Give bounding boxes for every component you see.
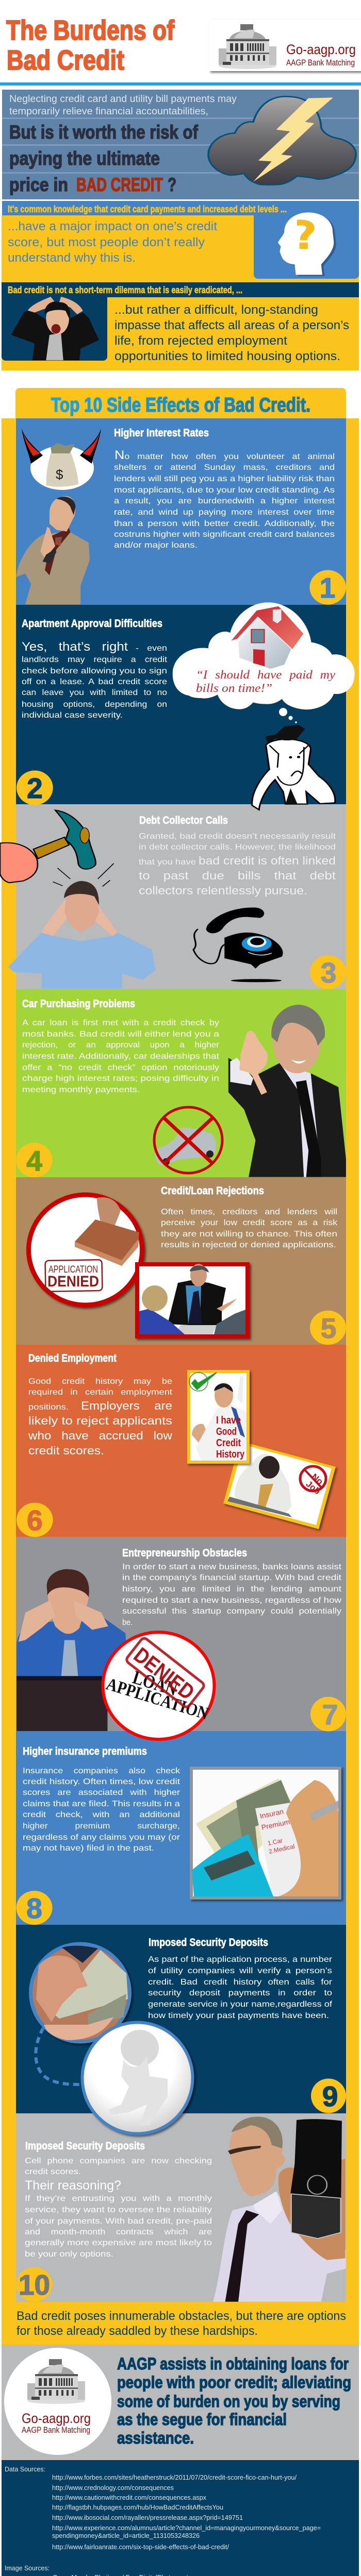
body text: Yes, that’s right [22, 640, 128, 654]
body text: successful this startup company could potentially [122, 1607, 341, 1616]
logo box: Go-aagp.org [209, 20, 361, 71]
photo: application denied stamp [29, 1195, 142, 1305]
icon: devil horned money bag [22, 429, 101, 490]
photo: insurance premium calculation: 1.Car [267, 1837, 283, 1847]
badge 8 [17, 1891, 53, 1925]
logo ellipse [4, 2348, 111, 2455]
body text: landlords may require a credit [22, 655, 168, 664]
good credit caption [216, 1415, 245, 1460]
common knowledge heading: It's common knowledge that credit card payments and increased debt levels ... [8, 204, 287, 214]
panel: intro question [2, 90, 359, 199]
data sources: http://www.experience.com/alumnus/article?channel_id=managingyourmoney&source_page= [52, 2524, 321, 2532]
panel: top 10 frame [2, 388, 359, 2345]
badge 3 [310, 955, 346, 989]
data sources: http://www.fairloanrate.com/six-top-side-effects-of-bad-credit/ [52, 2543, 229, 2551]
question headline: BAD CREDIT [76, 174, 163, 195]
panel: 8 insurance [16, 1731, 346, 1925]
body text: likely to reject applicants [28, 1414, 172, 1427]
body text [161, 1208, 338, 1249]
body text: security deposit payments in order to [148, 1989, 332, 1997]
panel: 1 higher interest [16, 418, 346, 605]
body text [22, 1019, 220, 1094]
body text [28, 1377, 173, 1457]
body text: required in certain employment [28, 1388, 173, 1397]
photo: application denied stamp: DENIED [47, 1273, 99, 1290]
icon: denied loan application: LOAN [130, 1667, 180, 1700]
quote: bills on time!” [196, 682, 272, 694]
body text: of utility companies will verify a person’s [148, 1967, 332, 1975]
body text: can leave you with limited to no [22, 688, 167, 697]
body text: credit history. Often times, low credit [23, 1777, 180, 1786]
body text: generally more expensive are most likely to [25, 2239, 212, 2247]
body text: credit check, with an additional [23, 1810, 180, 1819]
question headline: paying the ultimate [9, 148, 160, 169]
body text: off on a lease. A bad credit score [22, 677, 167, 686]
good credit caption: Good [216, 1426, 237, 1437]
photo: business meeting [135, 1262, 250, 1338]
heading: Imposed Security Deposits [149, 1937, 268, 1948]
data sources [5, 2465, 321, 2551]
body text: results in rejected or denied applications. [161, 1241, 336, 1249]
impact text: ...have a major impact on one’s credit [8, 219, 217, 233]
image sources [5, 2564, 315, 2576]
panel: 10 phone [16, 2113, 346, 2302]
good credit caption: History [216, 1449, 245, 1460]
body text: costruns higher with significant credit card balances [114, 530, 335, 539]
icon: hammer [0, 810, 114, 887]
dilemma heading: Bad credit is not a short-term dilemma that is easily eradicated, ... [8, 284, 242, 295]
photo: insurance premium calculation: 2.Medical [268, 1843, 296, 1855]
data sources: http://flagstbh.hubpages.com/hub/HowBadCreditAffectsYou [52, 2503, 223, 2511]
photo: man with headache in blue shirt [8, 881, 155, 989]
burden text: ...but rather a difficult, long-standing [114, 303, 318, 317]
badge 5 [310, 1311, 346, 1345]
body text: rejection, or an approval upon a higher [22, 1041, 220, 1049]
badge 10: 10 [19, 2269, 50, 2301]
data sources: http://www.cautionwithcredit.com/consequences.aspx [52, 2494, 206, 2501]
intro text: Neglecting credit card and utility bill payments may [9, 94, 237, 105]
body text: lenders will still peg you as a higher liability risk than [114, 474, 335, 483]
body text: in the company’s financial startup. With bad credit [122, 1573, 342, 1582]
body text: how timely your past payments have been. [148, 2011, 329, 2020]
photo: application denied stamp: APPLICATION [48, 1264, 98, 1275]
body text: claims that are filed. This results in a [23, 1800, 180, 1808]
body text: generate service in your name,regardless of [148, 2000, 333, 2009]
body text: most applicants, due to your low credit standing. As [114, 486, 335, 495]
dilemma band [2, 282, 359, 297]
question headline [9, 122, 199, 195]
title: The Burdens of [6, 15, 175, 46]
AAGP text [117, 2354, 351, 2447]
badge 1 [309, 570, 346, 605]
panel: 6 employment [16, 1345, 346, 1537]
closing text [17, 2309, 346, 2338]
photo: businessman thumb down [228, 1005, 346, 1177]
photo: hands with dollars [31, 1944, 130, 2042]
body text: credit. Bad credit history often calls for [148, 1978, 333, 1987]
quote: “I should have paid my [196, 668, 336, 681]
photo: entrepreneur with headache [17, 1569, 126, 1731]
body text: As part of the application process, a number [148, 1955, 333, 1964]
body text [22, 640, 168, 720]
badge 4: 4 [26, 1145, 42, 1177]
intro text: temporarily relieve financial accountabilities, [9, 106, 208, 117]
logo ellipse: AAGP Bank Matching [22, 2426, 90, 2435]
blue block [254, 215, 359, 279]
body text: offer a “no credit check” option notoriously [22, 1063, 219, 1072]
body text: rate, and wind up paying more interest over time [114, 508, 335, 517]
panel: sources [2, 2460, 359, 2576]
body text: credit scores. [28, 1444, 104, 1457]
body text: be your only options. [25, 2250, 113, 2259]
photo: no job [223, 1441, 336, 1529]
good credit caption: Credit [216, 1437, 241, 1449]
body text: Often times, creditors and lenders will [161, 1208, 337, 1216]
badge 9 [311, 2078, 346, 2113]
heading: Denied Employment [28, 1352, 117, 1364]
body text: charge high interest rates; posing difficulty in [22, 1074, 219, 1083]
body text: and/or major loans. [114, 541, 198, 550]
badge 3: 3 [321, 957, 336, 989]
badge 8: 8 [26, 1892, 42, 1924]
heading: Higher insurance premiums [23, 1745, 147, 1757]
badge 9: 9 [322, 2080, 338, 2112]
icon: worried cartoon man [252, 725, 335, 810]
data sources: spendingmoney&article_id=article_1131053248326 [52, 2532, 200, 2539]
icon: thought cloud with house [173, 602, 355, 723]
dashed arc [36, 2028, 83, 2084]
body text: bad credit is often linked [199, 854, 336, 867]
body text: Employers are [81, 1399, 172, 1412]
badge 1: 1 [320, 572, 335, 604]
body text: of your payments. With bad credit, pre-paid [25, 2217, 212, 2226]
body text: required to start a new business, regardless of how [122, 1596, 342, 1605]
heading: Debt Collector Calls [139, 815, 228, 826]
body text: and month-month contracts which are [25, 2228, 212, 2236]
icon: falling telephone [193, 908, 283, 982]
body text [114, 448, 335, 550]
photo: no job: Job [304, 1479, 322, 1496]
quote [196, 668, 336, 694]
panel: 7 entrepreneurship [16, 1537, 346, 1739]
burden text [114, 303, 349, 363]
heading: Entrepreneurship Obstacles [122, 1547, 247, 1559]
body text [139, 832, 336, 897]
badge 2 [17, 771, 53, 805]
body text: Cell phone companies are now checking [25, 2157, 212, 2165]
panel: common knowledge [2, 201, 359, 370]
body text: regardless of any claims you may (or [23, 1833, 180, 1842]
body text: interest rate. Additionally, car dealerships that [22, 1052, 220, 1061]
impact text: understand why this is. [8, 251, 136, 265]
heading: Higher Interest Rates [114, 427, 209, 439]
body text: check before allowing you to sign [22, 667, 167, 675]
body text: meeting monthly payments. [22, 1086, 140, 1094]
body text: - even [136, 644, 167, 653]
body text: Granted, bad credit doesn’t necessarily result [139, 832, 336, 841]
photo: depressed 3d man [83, 2023, 193, 2134]
body text: Insurance companies also check [23, 1767, 180, 1775]
body text: who have accrued low [28, 1429, 172, 1442]
body text: shelters or attend Sunday mass, creditors and [114, 463, 335, 472]
body text: No matter how often you volunteer at animal [114, 448, 335, 462]
body text [25, 2157, 212, 2259]
photo: frustrated man [11, 297, 99, 360]
badge 2: 2 [27, 772, 43, 804]
panel: AAGP assists [2, 2345, 359, 2460]
badge 6: 6 [27, 1504, 43, 1536]
body text: positions. [28, 1403, 69, 1412]
body text: may not have) filed in the past. [23, 1844, 154, 1853]
icon: storm cloud with lightning [208, 96, 356, 185]
heading: Credit/Loan Rejections [161, 1185, 264, 1197]
data sources: http://www.forbes.com/sites/heatherstruck/2011/07/20/credit-score-fico-can-hurt-you/ [52, 2473, 297, 2481]
panel: 3 debt collector [0, 804, 346, 989]
good credit caption: I have [216, 1415, 241, 1426]
body text: in debt collector calls. However, the likelihood [139, 843, 336, 852]
icon: no car [154, 1107, 222, 1173]
badge 5: 5 [321, 1312, 336, 1344]
body text: higher premium surcharge, [23, 1822, 180, 1831]
body text: service, they want to oversee the reliability [25, 2206, 212, 2214]
logo ellipse: Go-aagp.org [22, 2411, 91, 2426]
image sources: Image Sources: [5, 2564, 50, 2572]
impact text [8, 219, 217, 265]
icon: denied loan application: APPLICATION [104, 1674, 211, 1724]
closing text: for those already saddled by these hardships. [17, 2324, 258, 2338]
body text: most banks. Bad credit will either lend you a [22, 1030, 219, 1039]
body text: Their reasoning? [25, 2178, 121, 2193]
data sources: http://www.ibosocial.com/rayallen/pressrelease.aspx?prid=149751 [52, 2514, 243, 2521]
body text [23, 1767, 180, 1853]
title: Bad Credit [7, 45, 124, 76]
closing text: Bad credit poses innumerable obstacles, but there are options [17, 2309, 346, 2323]
question headline: But is it worth the risk of [9, 122, 199, 143]
panel: 2 apartment approval [16, 602, 355, 810]
body text: that you have [139, 858, 196, 867]
body text: be. [122, 1618, 133, 1627]
impact text: score, but most people don’t really [8, 235, 205, 249]
icon: devil horned money bag: $ [56, 467, 63, 482]
panel: 9 security deposits [16, 1925, 346, 2134]
badge 6 [17, 1503, 53, 1537]
body text: than a person with better credit. Additionally, the [114, 519, 335, 528]
badge 7 [310, 1697, 346, 1731]
question headline: price in [9, 174, 68, 195]
title [6, 15, 175, 76]
question headline: ? [168, 174, 176, 195]
icon: denied loan application: DENIED [129, 1642, 199, 1704]
body text: A car loan is first met with a credit check by [22, 1019, 219, 1027]
icon: head with question mark [278, 212, 336, 276]
panel: 4 car purchasing [16, 989, 346, 1177]
burden text: life, from rejected employment [114, 334, 287, 348]
body text: Good credit history may be [28, 1377, 172, 1386]
dark block [2, 297, 107, 361]
photo: insurance premium calculation: Premium [260, 1818, 290, 1832]
photo: no job: No [309, 1472, 325, 1487]
badge 4 [17, 1143, 53, 1177]
body text: scores are associated with higher [23, 1788, 180, 1797]
photo: man holding phone [213, 2116, 346, 2302]
photo: good credit man [187, 1370, 250, 1464]
burden text: impasse that affects all areas of a person’s [114, 318, 349, 332]
body text: they are not willing to chance. This often [161, 1230, 337, 1239]
body text: collectors relentlessly pursue. [139, 884, 307, 897]
heading: Car Purchasing Problems [22, 998, 135, 1010]
data sources: Data Sources: [5, 2465, 45, 2473]
AAGP text: assistance. [117, 2429, 194, 2447]
photo: insurance premium calculation: Insuran [259, 1807, 284, 1820]
body text [148, 1955, 333, 2020]
intro text [9, 94, 237, 117]
body text: individual case severity. [22, 711, 123, 720]
body text: housing options, depending on [22, 700, 167, 709]
body text: perceive your low credit score as a risk [161, 1218, 338, 1227]
photo: praying man [16, 496, 90, 604]
data sources: http://www.crednology.com/consequences [52, 2484, 174, 2492]
heading: Apartment Approval Difficulties [22, 618, 162, 630]
body text: In order to start a new business, banks loans assist [122, 1563, 342, 1571]
body text: If they’re entrusting you with a monthly [25, 2194, 212, 2203]
burden text: opportunities to limited housing options. [114, 349, 340, 363]
body text: history, you are limited in the lending amount [122, 1585, 342, 1594]
body text: to past due bills that debt [139, 869, 336, 882]
badge 7: 7 [322, 1699, 338, 1731]
icon: denied loan application [103, 1632, 215, 1739]
body text: a result, you are burdenedwith a higher interest [114, 497, 335, 505]
photo: insurance premium calculation [190, 1767, 341, 1900]
panel: 5 rejections [16, 1177, 346, 1345]
AAGP text: as the segue for financial [117, 2410, 287, 2429]
body text: credit scores. [25, 2167, 81, 2176]
heading: Imposed Security Deposits [25, 2140, 145, 2152]
body text [122, 1563, 342, 1627]
